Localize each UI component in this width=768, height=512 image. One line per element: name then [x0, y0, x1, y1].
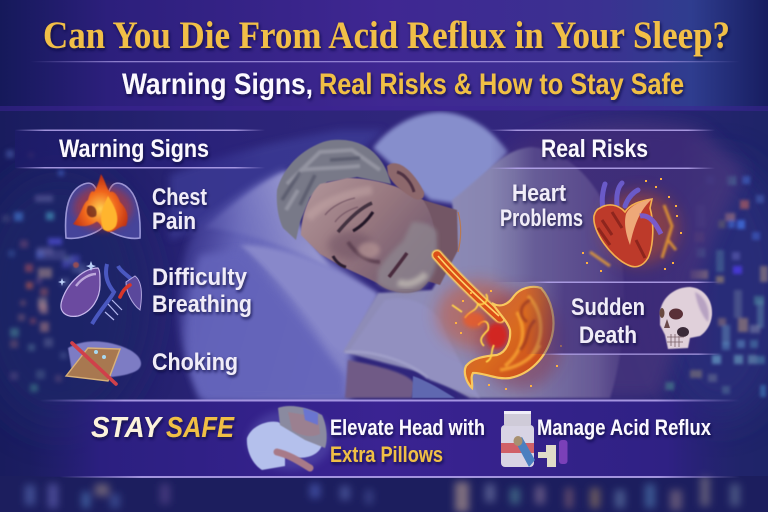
icon: choking, crossed out — [66, 341, 141, 384]
panel: real risks — [490, 130, 720, 355]
mouth — [389, 253, 407, 277]
bokeh lights left — [2, 150, 89, 392]
panel: warning signs — [15, 130, 265, 384]
icon: lungs on fire — [66, 174, 140, 238]
pillow under head — [240, 245, 378, 355]
bokeh lights bottom — [25, 476, 740, 512]
icon: inhaler — [538, 445, 556, 467]
icon: capsule — [559, 440, 568, 464]
red hot spot — [486, 323, 508, 349]
label: heart problems: Heart — [512, 180, 566, 207]
label: chest pain: Chest — [152, 184, 207, 211]
icon: sleeper on pillow — [247, 406, 332, 470]
shirt — [343, 147, 624, 398]
big pillow left — [178, 170, 378, 400]
label: heart problems — [500, 180, 583, 232]
label: choking: Choking — [152, 349, 238, 376]
label: chest pain: Pain — [152, 208, 196, 235]
header band — [0, 0, 768, 111]
label: heart problems: Problems — [500, 205, 583, 232]
label: sudden death — [571, 294, 645, 349]
icon: skull — [660, 287, 712, 349]
face — [301, 178, 437, 293]
hair — [277, 140, 391, 240]
forehead highlight — [308, 190, 372, 218]
icon: lungs and airway — [58, 261, 141, 324]
label: elevate head with extra pillows: Elevate Head with — [330, 415, 485, 440]
icon: heart on fire — [582, 178, 682, 272]
shoulder haze on the right — [440, 122, 745, 398]
label: manage acid reflux: Manage Acid Reflux — [537, 415, 712, 440]
shirt lower light — [348, 299, 480, 398]
eyes and brows — [338, 203, 372, 232]
hem highlights — [345, 352, 428, 378]
label: difficulty breathing: Difficulty — [152, 264, 248, 291]
label: difficulty breathing — [152, 264, 252, 318]
illustration: man sleeping — [170, 112, 745, 400]
neck — [413, 197, 458, 285]
arm — [345, 360, 415, 398]
blanket behind, dark blue — [170, 130, 385, 240]
heading: stay safe: STAY — [91, 412, 164, 444]
label: sudden death: Death — [579, 322, 637, 349]
heading: warning signs: Warning Signs — [59, 135, 209, 163]
nose — [348, 242, 380, 262]
label: chest pain — [152, 184, 207, 235]
pillow top surface — [205, 170, 330, 268]
beard — [377, 222, 437, 293]
label: elevate head with extra pillows — [330, 415, 485, 467]
label: difficulty breathing: Breathing — [152, 291, 252, 318]
heading: stay safe — [91, 412, 235, 444]
label: sudden death: Sudden — [571, 294, 645, 321]
icon: medicine bottle — [501, 411, 568, 467]
bokeh lights right — [665, 176, 768, 397]
heading: real risks: Real Risks — [541, 135, 648, 163]
subtitle: Warning Signs, — [122, 68, 313, 101]
label: elevate head with extra pillows: Extra Pillows — [330, 442, 443, 467]
icon: esophagus and stomach on fire — [437, 255, 562, 390]
ear — [387, 163, 424, 200]
cheek shading — [328, 231, 372, 259]
heading: stay safe: SAFE — [166, 412, 235, 444]
blanket fold — [187, 250, 347, 400]
back pillow — [373, 112, 508, 205]
subtitle — [122, 68, 684, 101]
subtitle: Real Risks & How to Stay Safe — [319, 68, 684, 101]
panel: stay safe — [30, 400, 740, 478]
